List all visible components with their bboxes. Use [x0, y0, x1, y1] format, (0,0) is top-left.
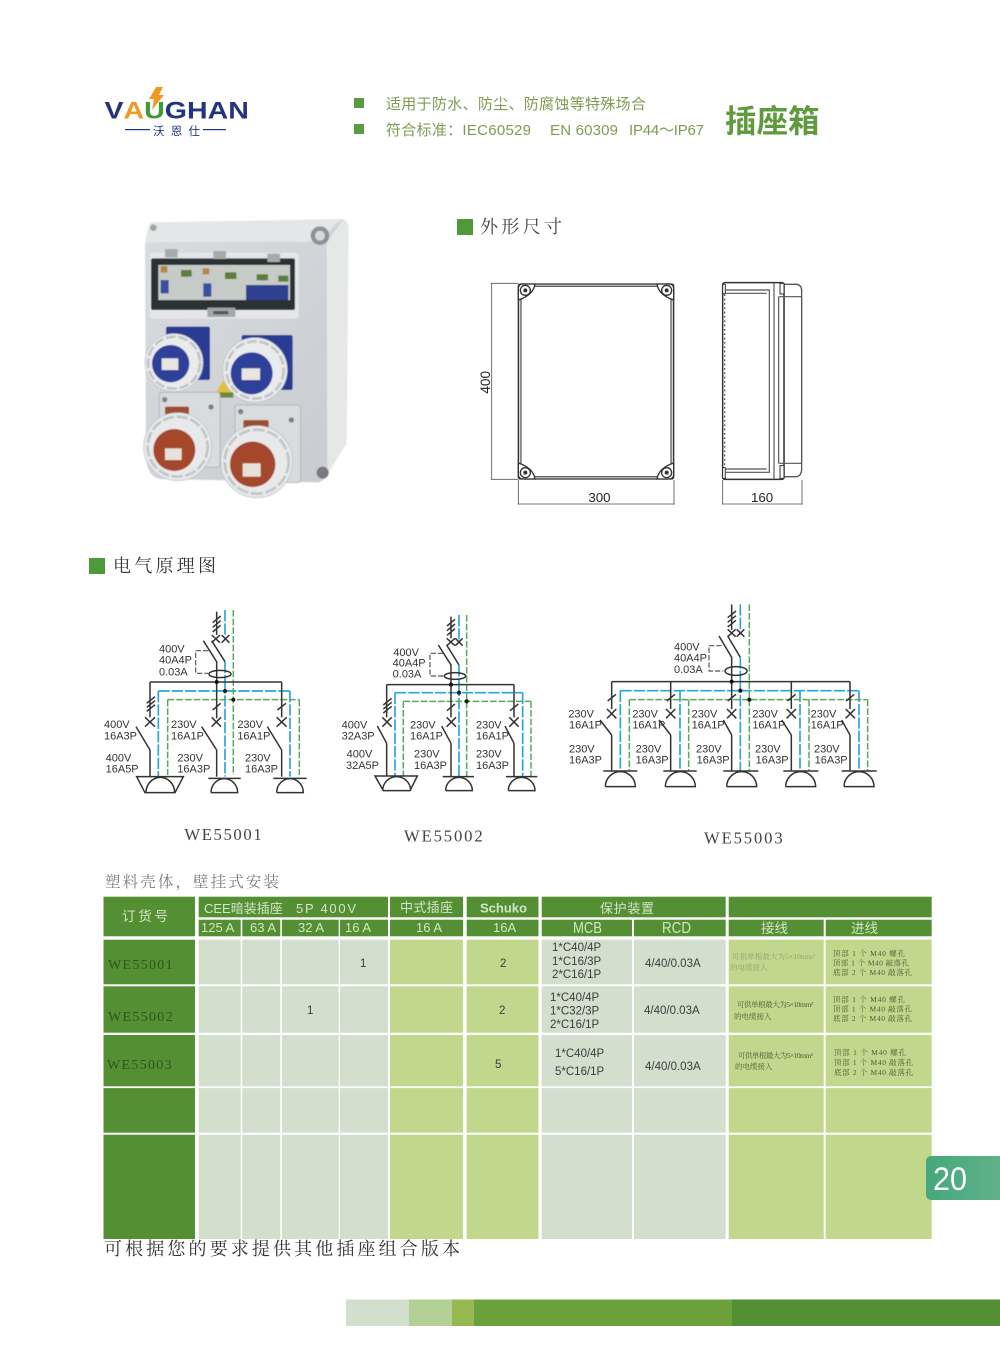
sockets: [375, 776, 537, 791]
table row: WE55003: 顶部 1 个 M40 螺孔: [834, 1047, 906, 1057]
residual current ring: [209, 670, 231, 678]
page number tab: [926, 1156, 1000, 1200]
enclosure outer: [518, 284, 674, 479]
table row: WE55001: 顶部 1 个 M40 螺孔: [833, 948, 906, 958]
footer colour bar: [346, 1300, 1000, 1326]
schematic: WE55003: 230V: [755, 743, 781, 755]
table row: WE55003: 5*C16/1P: [555, 1066, 605, 1078]
table row: WE55001: [108, 942, 912, 981]
residual current ring: [725, 667, 747, 675]
box top bevel: [145, 219, 343, 242]
schematic: WE55002: 16A3P: [414, 760, 447, 772]
table row: WE55001: 2: [500, 958, 506, 970]
page number: 20: [933, 1161, 967, 1197]
header labels: 63 A: [250, 920, 276, 935]
header labels: 16 A: [345, 920, 371, 935]
schematic: WE55001: 230V: [177, 753, 204, 765]
schematic: WE55002: 16A3P: [476, 760, 509, 772]
schematic: WE55003: 230V: [569, 743, 595, 755]
schematic: WE55001: 0.03A: [159, 666, 188, 678]
table body: [100, 940, 935, 1239]
schematic: WE55001: 230V: [245, 753, 271, 765]
socket and wiring columns: [390, 940, 932, 1239]
header labels: Schuko: [480, 900, 527, 916]
table row: WE55003: [107, 1047, 914, 1078]
schematic: WE55002: 16A1P: [476, 730, 509, 742]
schematic: WE55001: 230V: [171, 719, 197, 731]
table row: WE55003: 1*C40/4P: [555, 1048, 605, 1060]
table row: WE55002: 1: [307, 1005, 313, 1017]
window frame: [149, 253, 299, 319]
header labels: 16A: [493, 920, 516, 935]
schematic: WE55003: 16A1P: [692, 719, 725, 731]
schematic: WE55002: 230V: [410, 720, 436, 732]
header labels: 16 A: [416, 920, 442, 935]
table row: WE55002: 底部 2 个 M40 敲落孔: [833, 1013, 912, 1023]
table row: WE55001: 顶部 1 个 M40 敲落孔: [833, 958, 910, 968]
schematic: WE55002: 0.03A: [393, 668, 422, 680]
table row: WE55003: 底部 2 个 M40 敲落孔: [834, 1067, 914, 1077]
box front: [145, 220, 343, 482]
header cells: [104, 897, 932, 936]
table row: WE55002: WE55002: [108, 1010, 174, 1025]
footnote: 可根据您的要求提供其他插座组合版本: [104, 1238, 460, 1259]
table row: WE55003: 5: [495, 1059, 501, 1071]
model name: WE55002: [404, 827, 483, 846]
table row: WE55003: WE55003: [107, 1058, 173, 1073]
live wires and switches: [600, 604, 855, 771]
header labels: 保护装置: [600, 901, 654, 916]
enclosure inner: [521, 286, 671, 477]
schematic: WE55002: 32A5P: [346, 760, 379, 772]
side lugs: [723, 283, 784, 478]
earth wires: [629, 604, 868, 771]
schematic: WE55003: 16A1P: [632, 719, 665, 731]
schematic: WE55003: 230V: [814, 743, 840, 755]
residual current ring: [444, 673, 466, 679]
schematic: WE55002: 40A4P: [393, 658, 426, 670]
schematic: WE55001: 40A4P: [159, 654, 192, 666]
table row: WE55002: 4/40/0.03A: [644, 1005, 700, 1017]
header labels: 订货号: [122, 908, 168, 924]
blue socket 1: [145, 327, 210, 392]
labels: 400V: [159, 643, 185, 655]
neutral wires: [158, 610, 290, 777]
earth wires: [168, 610, 299, 775]
heading marker: [89, 558, 105, 574]
dimension drawing: side view: [722, 283, 803, 505]
schematic: WE55003: 16A3P: [815, 754, 848, 766]
model name: WE55001: [184, 825, 262, 844]
RCD dashed link: [430, 653, 443, 676]
logo right rule: [203, 129, 226, 130]
table header: [104, 897, 932, 937]
table row: WE55001: 1*C40/4P: [552, 942, 602, 954]
header labels: RCD: [662, 920, 691, 937]
header labels: 中式插座: [400, 900, 453, 915]
heading text: 电气原理图: [113, 556, 216, 576]
table row: WE55002: [108, 992, 912, 1031]
schematic: WE55001: 16A1P: [171, 730, 204, 742]
logo: Vaughan: [104, 87, 249, 138]
dimension 300: 300: [588, 490, 611, 505]
header labels: 125 A: [201, 920, 235, 935]
schematic: WE55002: 400V: [347, 749, 373, 761]
schematic: WE55003: 230V: [811, 709, 837, 721]
box side: [325, 219, 349, 475]
schematic: WE55003: 230V: [636, 743, 662, 755]
side left dotted edge: [723, 294, 727, 468]
heading text: 外形尺寸: [480, 217, 562, 237]
schematic: WE55002: 400V: [342, 720, 368, 732]
schematic: WE55001: 16A1P: [237, 730, 270, 742]
window latch: [207, 308, 235, 317]
live wires and switches: [136, 612, 287, 777]
schematic: WE55002: 230V: [476, 749, 502, 761]
table row: WE55002: 可供单根最大为5×10mm²: [737, 999, 814, 1009]
header labels: [122, 900, 878, 937]
earth wires: [403, 615, 531, 776]
CEE and protection columns: [199, 940, 726, 1239]
schematic: WE55001: 400V: [106, 753, 132, 765]
heading: electrical schematic: [89, 556, 216, 576]
schematic: WE55003: 16A1P: [569, 719, 602, 731]
model name: WE55003: [704, 828, 783, 847]
RCD dashed link: [709, 646, 723, 671]
window: [151, 258, 295, 310]
header labels: 进线: [851, 921, 878, 936]
labels: 400V: [674, 642, 700, 654]
schematic: WE55003: 16A3P: [569, 754, 602, 766]
table row: WE55003: 可供单根最大为5×10mm²: [738, 1050, 814, 1060]
blue socket 2: [223, 335, 293, 402]
dimension 160: 160: [751, 490, 773, 505]
header labels: 32 A: [298, 920, 324, 935]
logo wordmark: VAUGHAN: [104, 97, 249, 124]
schematic: WE55002: 230V: [414, 749, 440, 761]
table row: WE55002: 的电缆接入: [734, 1011, 772, 1021]
icon: lightning bolt: [149, 87, 164, 110]
schematic: WE55001: 400V: [104, 719, 130, 731]
schematic: WE55003: 40A4P: [674, 653, 707, 665]
schematic: WE55003: 16A1P: [811, 719, 844, 731]
bottom-right screw: [317, 467, 329, 479]
schematic: WE55003: 16A3P: [636, 754, 669, 766]
order number column: [104, 940, 195, 1239]
neutral wires: [620, 604, 859, 771]
table row: WE55003: 的电缆接入: [735, 1061, 773, 1071]
heading: outline dimensions: [457, 217, 562, 237]
heading marker: [457, 219, 473, 235]
schematic: WE55003: [568, 604, 877, 847]
feature bullets: [354, 95, 704, 139]
schematic: WE55001: 230V: [237, 719, 264, 731]
table row: WE55002: 2: [499, 1005, 505, 1017]
breaker modules: [158, 265, 290, 300]
bullet text: usage: 适用于防水、防尘、防腐蚀等特殊场合: [386, 95, 646, 113]
product photo: socket box: [144, 219, 349, 498]
standard IP: IP44～IP67: [629, 122, 704, 139]
side inner lines: [726, 283, 802, 479]
schematic: WE55002: [342, 615, 537, 846]
labels: 400V: [393, 647, 420, 659]
schematic: WE55003: 16A1P: [752, 719, 785, 731]
table row: WE55001: 1*C16/3P: [552, 956, 602, 968]
table row: WE55001: 的电缆接入: [730, 962, 768, 972]
table row: WE55001: WE55001: [108, 958, 174, 973]
schematic: WE55003: 230V: [692, 709, 718, 721]
table row: WE55001: 可供单根最大为5×10mm²: [732, 951, 816, 961]
schematic: WE55002: 32A3P: [342, 730, 375, 742]
sockets: [137, 777, 307, 793]
standard EN: EN 60309: [550, 122, 618, 139]
table row: WE55001: 2*C16/1P: [552, 969, 602, 981]
schematic: WE55002: 230V: [476, 720, 502, 732]
top-left screw: [150, 224, 157, 231]
schematic: WE55001: 16A3P: [104, 730, 137, 742]
bullet square: [354, 124, 364, 134]
table row: WE55001: 4/40/0.03A: [645, 958, 701, 970]
live wires and switches: [377, 617, 519, 776]
corner screws: [518, 284, 674, 479]
schematic: WE55003: 0.03A: [674, 664, 703, 676]
top-right screw: [311, 226, 329, 245]
table caption: 塑料壳体，壁挂式安装: [105, 873, 279, 891]
dimension 400: 400: [478, 370, 493, 394]
table row: WE55003: 顶部 1 个 M40 敲落孔: [834, 1057, 914, 1067]
schematic: WE55003: 230V: [752, 709, 779, 721]
dimension drawing: front view: [478, 283, 675, 505]
schematic: WE55003: 230V: [696, 743, 722, 755]
bullet text: standards: 符合标准：IEC60529: [386, 122, 531, 139]
schematic: WE55002: 16A1P: [410, 730, 443, 742]
table row: WE55002: 1*C32/3P: [550, 1006, 600, 1018]
table row: WE55001: 1: [360, 958, 366, 970]
side body: [723, 283, 784, 479]
header labels: 接线: [761, 920, 788, 936]
junction dots: [449, 683, 469, 703]
logo Chinese name: 沃恩仕: [153, 125, 200, 138]
red socket 1: [144, 392, 220, 481]
junction dots: [730, 680, 751, 702]
table row: WE55001: 底部 2 个 M40 敲落孔: [833, 967, 912, 977]
junction dots: [215, 680, 235, 702]
schematic: WE55003: 16A3P: [756, 754, 789, 766]
header labels: MCB: [573, 920, 602, 937]
bullet square: [354, 98, 364, 108]
schematic: WE55003: 16A3P: [697, 754, 730, 766]
side lid: [784, 284, 802, 477]
hinges: [165, 249, 178, 257]
header labels: CEE暗装插座: [204, 901, 283, 916]
schematic: WE55001: 16A5P: [106, 764, 139, 776]
title: 插座箱: [725, 103, 820, 139]
table row: WE55002: 顶部 1 个 M40 螺孔: [833, 994, 906, 1004]
table row: WE55002: 1*C40/4P: [550, 992, 600, 1004]
height dimension line: [491, 283, 518, 480]
table row: WE55003: 4/40/0.03A: [645, 1061, 701, 1073]
logo left rule: [125, 129, 150, 130]
RCD dashed link: [196, 651, 208, 673]
sockets: [603, 771, 877, 787]
tab shape: [926, 1156, 1000, 1200]
depth dimension line: [722, 480, 803, 505]
warning label: [214, 380, 233, 396]
schematic: WE55001: 16A3P: [245, 764, 278, 776]
table row: WE55002: 顶部 1 个 M40 敲落孔: [833, 1004, 912, 1014]
schematic: WE55001: [104, 610, 307, 844]
warning caption: [213, 392, 233, 398]
red socket 2: [221, 405, 301, 498]
schematic: WE55001: 16A3P: [177, 764, 210, 776]
header labels: 5P 400V: [296, 901, 356, 916]
blue toggles: [161, 280, 169, 293]
schematic: WE55003: 230V: [632, 709, 659, 721]
schematic: WE55003: 230V: [568, 709, 595, 721]
width dimension line: [518, 480, 675, 505]
neutral wires: [395, 615, 523, 776]
table row: WE55002: 2*C16/1P: [550, 1019, 600, 1031]
